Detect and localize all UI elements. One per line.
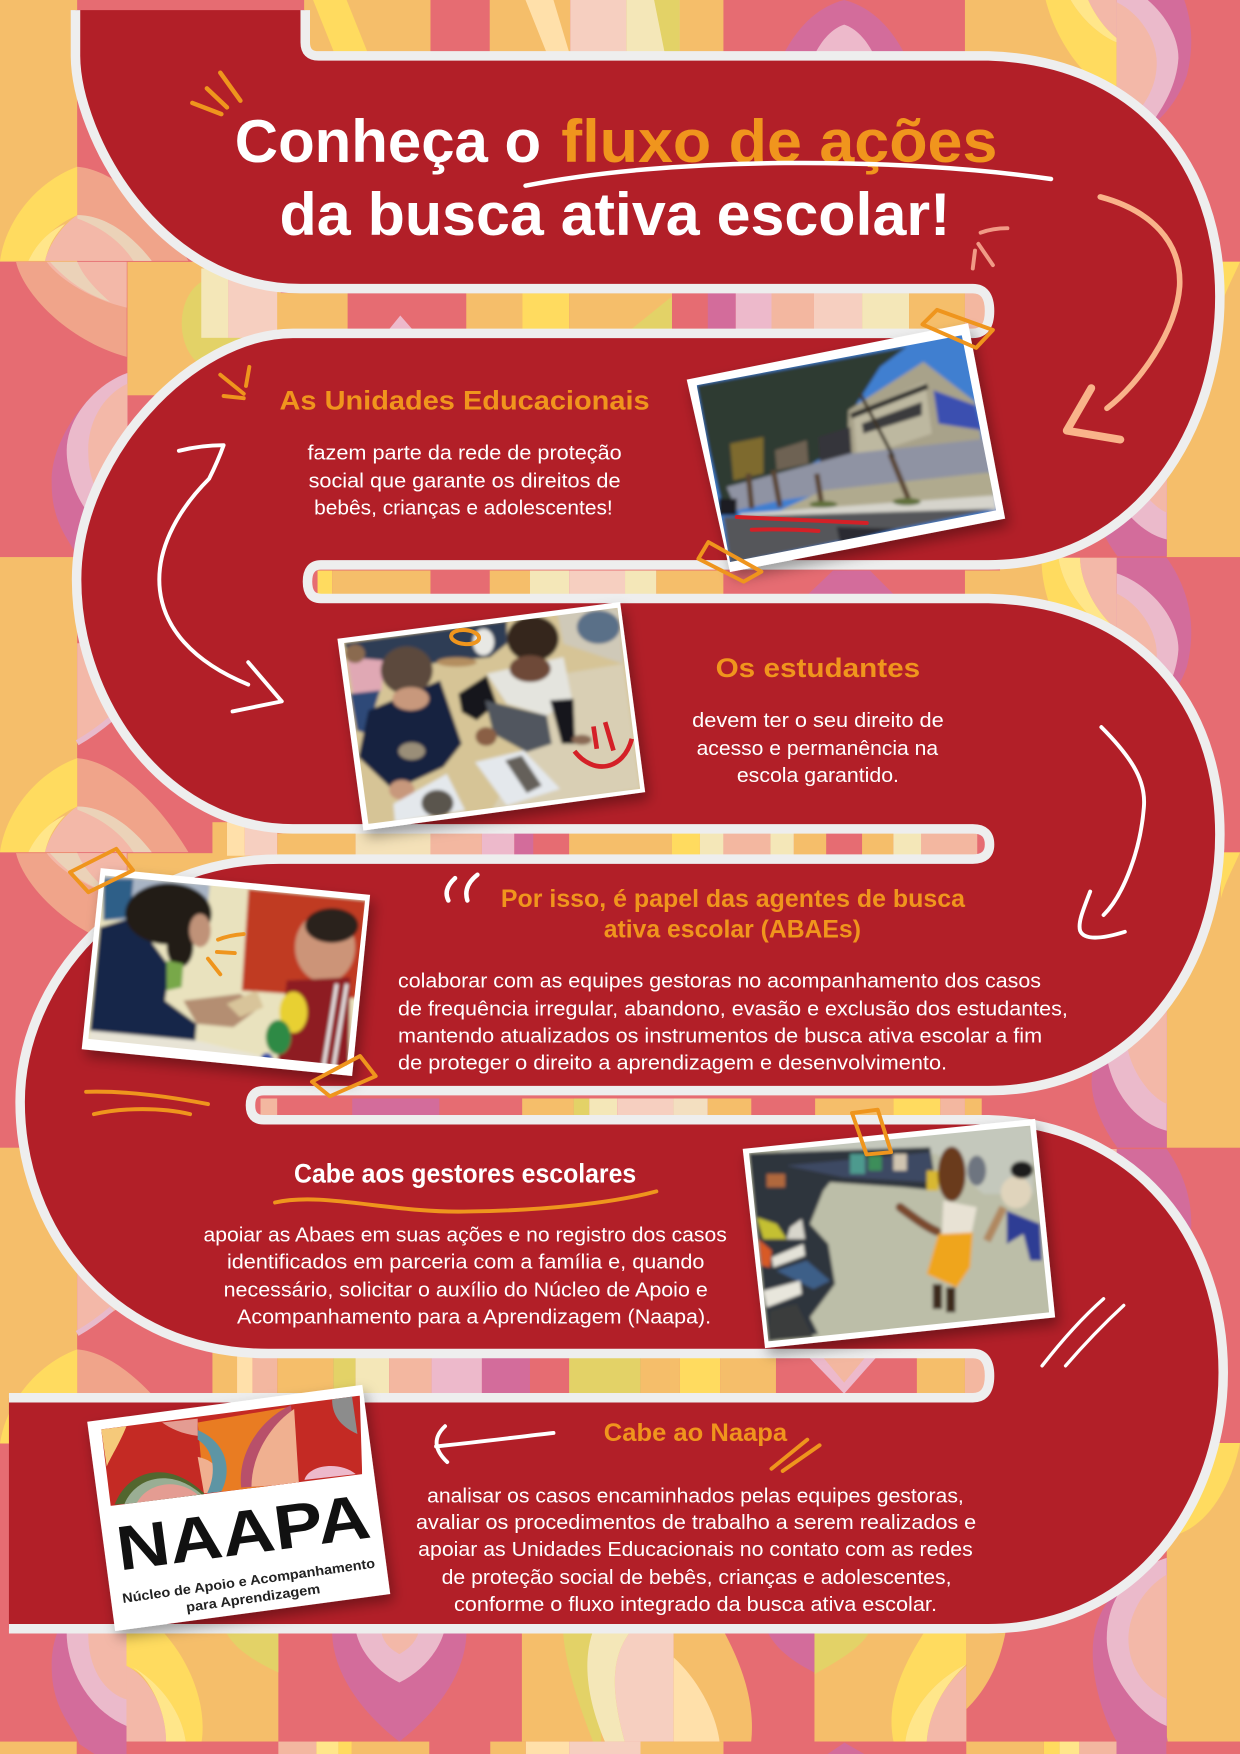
photo: agent with child <box>80 867 373 1081</box>
heading: Cabe aos gestores escolares <box>294 1158 636 1188</box>
logo wordmark: NAAPA <box>112 1482 374 1584</box>
arrow: peach curved <box>1067 197 1180 440</box>
section: gestores escolares <box>203 1158 727 1328</box>
gap strip 3 tiles <box>212 822 977 856</box>
left peach remnant rows 3 and 5 <box>77 643 117 1333</box>
body text: bebês, crianças e adolescentes! <box>314 497 613 520</box>
right orange tiles <box>1167 262 1240 1742</box>
body text <box>203 1224 727 1328</box>
photo tape <box>698 542 761 582</box>
white slash marks <box>1042 1299 1124 1366</box>
left motif copy: row 6 <box>0 1349 281 1754</box>
orange lines <box>86 1092 208 1114</box>
right motif copy: row 5 <box>1000 1149 1191 1310</box>
body text <box>398 970 1068 1074</box>
body text: fazem parte da rede de proteção <box>307 442 622 465</box>
section: As Unidades Educacionais <box>280 385 650 520</box>
body text: acesso e permanência na <box>697 737 939 760</box>
section: agentes ABAEs <box>398 875 1068 1074</box>
right pink arcs row 4 <box>1092 996 1167 1148</box>
title <box>235 107 997 248</box>
photo: children drawing <box>330 600 650 841</box>
title: Conheça o <box>235 107 541 175</box>
body text: mantendo atualizados os instrumentos de busca ativa escolar a fim <box>398 1025 1042 1048</box>
body text: devem ter o seu direito de <box>692 709 944 732</box>
left motif repeated at row boundaries <box>0 167 281 572</box>
top strip tiles <box>304 0 1117 101</box>
coral burst marks <box>973 228 1007 268</box>
body text: de proteção social de bebês, crianças e adolescentes, <box>442 1566 952 1589</box>
photo tape <box>312 1056 376 1096</box>
gap strip 5 tiles <box>212 1337 990 1396</box>
red smile doodle <box>574 722 632 766</box>
body text: apoiar as Abaes em suas ações e no registro dos casos <box>203 1224 727 1247</box>
logo subtitle: Núcleo de Apoio e Acompanhamento <box>121 1556 376 1606</box>
right pink arcs row 6 <box>1093 1558 1170 1754</box>
body text: colaborar com as equipes gestoras no acompanhamento dos casos <box>398 970 1041 993</box>
body text: Acompanhamento para a Aprendizagem (Naapa). <box>237 1305 711 1328</box>
photo tape <box>922 310 993 348</box>
section: Cabe ao Naapa <box>416 1420 976 1616</box>
photo: school building <box>680 323 1013 572</box>
orange circle doodle <box>451 629 480 645</box>
body text <box>307 442 622 520</box>
heading: Cabe ao Naapa <box>604 1420 787 1447</box>
bottom mosaic strip <box>0 1742 1240 1754</box>
title burst marks <box>192 73 240 114</box>
arrow: white curved right <box>1080 727 1144 938</box>
body text <box>692 709 944 787</box>
quote mark <box>447 875 477 900</box>
photo tape <box>852 1110 891 1154</box>
right pink arcs row 2 <box>1092 405 1167 556</box>
arrow: white curved double <box>159 445 282 711</box>
left motif copy: row 4 <box>0 758 281 1163</box>
body text: analisar os casos encaminhados pelas equipes gestoras, <box>427 1484 964 1507</box>
heading <box>501 886 965 943</box>
title: fluxo de ações <box>561 107 997 175</box>
body text <box>416 1484 976 1616</box>
heading: As Unidades Educacionais <box>280 385 650 415</box>
right motif repeated <box>1000 0 1191 127</box>
photo tape <box>70 849 133 892</box>
body text: necessário, solicitar o auxílio do Núcleo de Apoio e <box>224 1278 708 1301</box>
gap strip 2 tiles <box>318 570 1010 595</box>
orange slash marks <box>772 1440 820 1471</box>
heading: Os estudantes <box>716 653 920 683</box>
gap strip 4 tiles <box>261 1098 982 1115</box>
body text: identificados em parceria com a família e, quando <box>227 1251 704 1274</box>
right motif copy: row 3 <box>1000 558 1191 719</box>
photo: meeting circle <box>730 1111 1063 1351</box>
title: da busca ativa escolar! <box>280 180 950 248</box>
bottom row tiles <box>127 1631 1006 1742</box>
body text: escola garantido. <box>737 764 899 787</box>
heading: Por isso, é papel das agentes de busca <box>501 886 965 913</box>
gap strip 1 tiles <box>201 268 990 338</box>
body text: conforme o fluxo integrado da busca ativa escolar. <box>454 1593 937 1616</box>
NAAPA logo card <box>87 1385 390 1631</box>
body text: de frequência irregular, abandono, evasão e exclusão dos estudantes, <box>398 998 1068 1021</box>
burst marks <box>220 367 249 398</box>
left column tiles <box>0 0 77 1443</box>
heading underline <box>275 1191 656 1212</box>
title underline <box>526 163 1051 186</box>
orange burst on photo <box>208 934 244 974</box>
arrow: white left <box>436 1426 553 1462</box>
body text: de proteger o direito a aprendizagem e desenvolvimento. <box>398 1051 947 1074</box>
logo subtitle: para Aprendizagem <box>185 1581 321 1615</box>
section: Os estudantes <box>692 653 944 787</box>
body text: apoiar as Unidades Educacionais no contato com as redes <box>418 1538 973 1561</box>
heading: ativa escolar (ABAEs) <box>604 916 861 943</box>
body text: social que garante os direitos de <box>309 470 621 493</box>
body text: avaliar os procedimentos de trabalho a serem realizados e <box>416 1511 976 1534</box>
